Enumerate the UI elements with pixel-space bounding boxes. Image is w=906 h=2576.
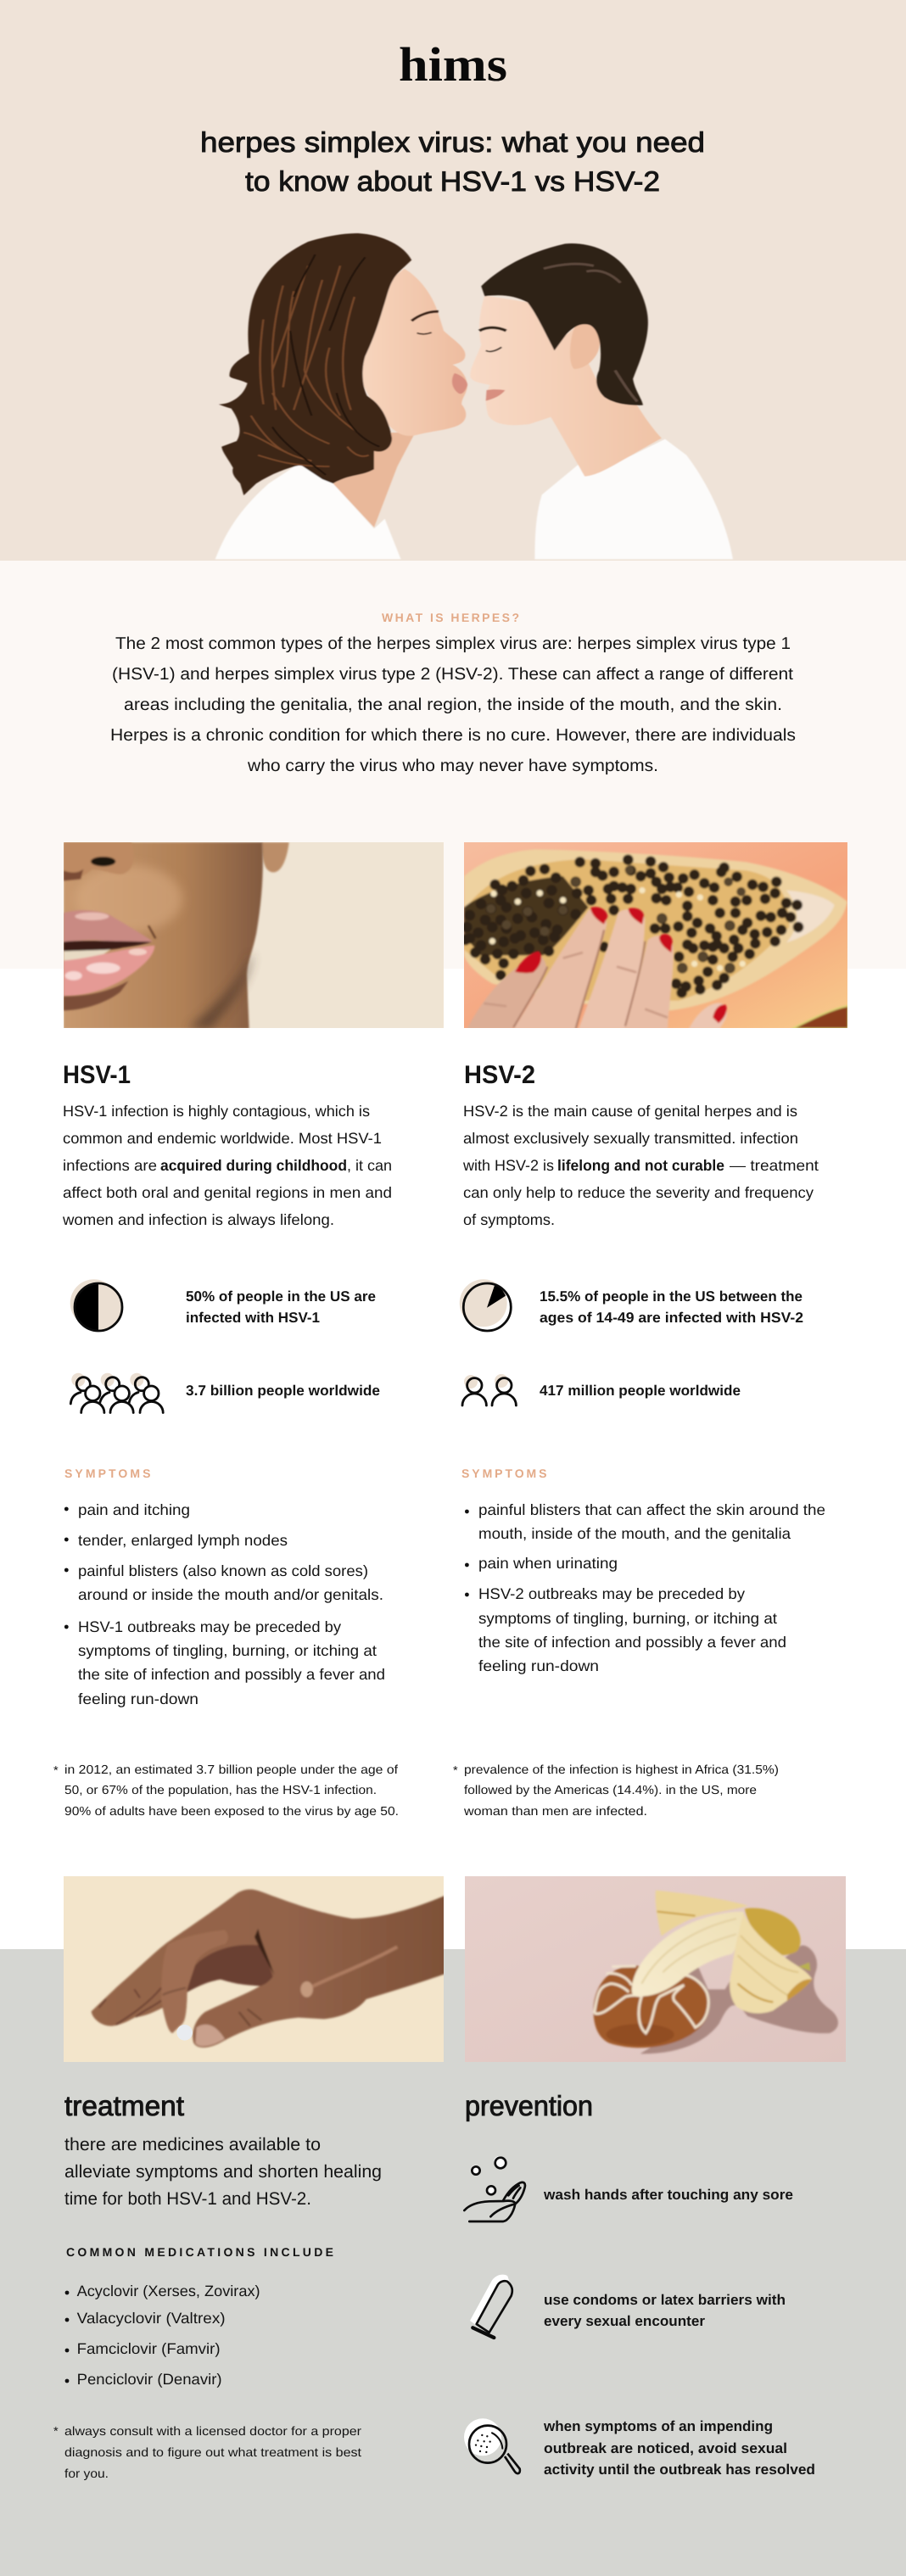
text: wash hands: wash hands after touching any sore [543,2187,793,2203]
palm shadow [187,1945,273,1992]
footnote: treatment: diagnosis and to figure out what treatment is best [64,2446,361,2460]
lip shadow [64,981,129,1010]
light flesh bits [492,891,742,968]
label: symptoms: SYMPTOMS [461,1467,549,1480]
title [200,126,705,197]
footnote: treatment: always consult with a licensed doctor for a proper [64,2425,361,2439]
list: HSV-2 symptoms: painful blisters that can affect the skin around the [478,1501,825,1518]
paragraph: HSV-2 [462,1103,819,1228]
text: avoid during outbreak: when symptoms of an impending [543,2418,773,2434]
intro panel background [0,561,906,969]
logo: hims: hims [399,38,507,92]
jaw shadow [188,955,253,1029]
pill [176,2025,193,2041]
inner seed chamber [786,891,835,942]
panel: prevention [464,2090,815,2478]
intro paragraph: who carry the virus who may never have symptoms. [247,757,658,775]
list: HSV-2 symptoms: symptoms of tingling, burning, or itching at [478,1610,777,1627]
list: HSV-1 symptoms [64,1501,385,1707]
icon: two people [462,1374,516,1405]
heading: prevention: prevention [465,2090,593,2121]
footnote: HSV-1 [53,1763,399,1819]
paragraph: HSV-1: affect both oral and genital regions in men and [63,1184,392,1201]
icon: condom [470,2275,512,2338]
paragraph: HSV-2: lifelong and not curable [557,1157,724,1174]
list: medications [65,2283,260,2388]
text: avoid during outbreak: outbreak are noticed, avoid sexual [544,2440,787,2456]
banana cap [745,1908,801,1955]
list: HSV-2 symptoms: the site of infection and possibly a fever and [478,1634,786,1651]
right person's ear [570,323,600,369]
nose [64,842,155,997]
left person's shirt [215,462,401,559]
label: symptoms: SYMPTOMS [64,1467,153,1480]
paragraph: treatment: there are medicines available to [64,2135,321,2154]
footnote: HSV-2: followed by the Americas (14.4%). in the US, more [464,1784,757,1797]
left person's face [361,269,467,436]
cheek and neck [64,842,263,1029]
paragraph: HSV-1: women and infection is always lifelong. [62,1211,334,1228]
paragraph: HSV-2: almost exclusively sexually transmitted. infection [463,1130,798,1147]
index finger [161,1930,228,2033]
photo: banana and donut [465,1876,847,2062]
stat: 15.5 percent HSV-2: ages of 14-49 are infected with HSV-2 [540,1310,803,1326]
footnote: HSV-1: in 2012, an estimated 3.7 billion people under the age of [64,1763,399,1777]
intro paragraph: (HSV-1) and herpes simplex virus type 2 (HSV-2). These can affect a range of different [112,665,793,684]
right person's features [479,327,506,331]
left person's hair highlights [243,265,369,467]
banana [632,1912,744,1997]
list: HSV-1 symptoms: painful blisters (also known as cold sores) [78,1562,368,1579]
footnote: HSV-2: woman than men are infected. [463,1805,647,1819]
list: medications: Penciclovir (Denavir) [77,2371,222,2388]
footnote: HSV-2 [453,1763,779,1819]
finger shading [513,930,645,1029]
icon: group of people [70,1373,163,1413]
stat: 50 percent HSV-1: infected with HSV-1 [186,1310,320,1326]
paragraph: HSV-1: HSV-1 infection is highly contagious, which is [63,1103,370,1120]
footnote: HSV-1: 90% of adults have been exposed to the virus by age 50. [64,1805,399,1819]
knuckle highlights [300,1981,313,1998]
title: to know about HSV-1 vs HSV-2 [245,165,660,197]
text: use condoms: use condoms or latex barriers with [544,2292,786,2308]
footnote: HSV-2: * [453,1764,458,1778]
back peel [656,1891,748,1936]
stat: 50 percent HSV-1 [186,1288,376,1326]
right person's hair [481,243,648,405]
list: HSV-2 symptoms: HSV-2 outbreaks may be preceded by [478,1585,745,1602]
skin glow [75,865,182,933]
icon: magnifying glass [464,2418,520,2473]
paragraph: treatment: alleviate symptoms and shorten healing [64,2162,382,2182]
intro paragraph: Herpes is a chronic condition for which there is no cure. However, there are individuals [110,726,796,745]
text: use condoms [544,2292,786,2329]
list: HSV-2 symptoms [465,1501,825,1674]
heading: HSV-1: HSV-1 [63,1061,131,1089]
finger crease [99,1988,161,2025]
paragraph: treatment [64,2135,382,2209]
intro paragraph [110,634,796,775]
heading: HSV-2: HSV-2 [464,1061,535,1089]
paragraph: HSV-2: — treatment [730,1157,819,1174]
thumbnail [195,2025,225,2046]
panel: HSV-2 overview [462,1061,819,1228]
text: avoid during outbreak [543,2418,815,2478]
donut [594,1965,709,2048]
rind [792,1006,848,1029]
papaya cavity [464,849,847,1010]
list: medications: Valacyclovir (Valtrex) [77,2310,226,2327]
paragraph: HSV-1: common and endemic worldwide. Most HSV-1 [63,1130,382,1147]
mouth corner [148,925,155,938]
footnote: HSV-1: 50, or 67% of the population, has the HSV-1 infection. [64,1784,377,1797]
photo: lips and cheek [64,842,444,1029]
dense seeds [464,876,589,955]
icon: washing hands [464,2156,525,2221]
label: common medications: COMMON MEDICATIONS INCLUDE [66,2245,333,2259]
list: medications: Famciclovir (Famvir) [77,2340,221,2357]
paragraph: HSV-1: , it can [347,1157,392,1174]
paragraph: HSV-2: can only help to reduce the severity and frequency [463,1184,814,1201]
hanging peel [730,1913,812,2014]
photo: hand holding pill [64,1876,445,2062]
treatment and prevention panel background [0,1949,906,2576]
paragraph: HSV-1 [62,1103,392,1228]
section label: what is herpes: WHAT IS HERPES? [382,611,522,624]
mouth [64,941,152,952]
stat: 15.5 percent HSV-2 [540,1288,803,1326]
shadows [640,1946,838,2054]
icon: pie wedge 15.5 percent [460,1279,511,1331]
text: avoid during outbreak: activity until the outbreak has resolved [544,2461,815,2478]
list: HSV-1 symptoms: feeling run-down [78,1690,199,1707]
ear [261,842,289,872]
list: HSV-1 symptoms: the site of infection and possibly a fever and [78,1666,385,1683]
footnote: treatment: * [53,2425,59,2439]
lower lip [64,946,154,997]
paragraph: HSV-1: acquired during childhood [160,1157,347,1174]
left person's neck [333,433,415,528]
footnote: treatment [53,2425,361,2481]
paragraph: HSV-2: HSV-2 is the main cause of genital herpes and is [463,1103,797,1120]
list: HSV-1 symptoms: HSV-1 outbreaks may be preceded by [78,1618,341,1635]
list: HSV-2 symptoms: mouth, inside of the mouth, and the genitalia [478,1525,791,1542]
panel: HSV-2 symptoms [461,1467,825,1674]
panel: HSV-1 symptoms [64,1467,385,1707]
list: medications: Acyclovir (Xerses, Zovirax) [77,2283,260,2299]
footnote: HSV-2: prevalence of the infection is highest in Africa (31.5%) [464,1763,779,1777]
paragraph: treatment: time for both HSV-1 and HSV-2. [64,2189,311,2209]
photo: couple kissing [215,233,733,559]
list: HSV-1 symptoms: around or inside the mouth and/or genitals. [78,1586,383,1603]
icing [595,1966,708,2033]
footnote: treatment: for you. [64,2467,109,2481]
heading: treatment: treatment [64,2090,184,2121]
left person's features [411,311,439,321]
title: herpes simplex virus: what you need [200,126,705,158]
footnote: HSV-1: * [53,1764,59,1778]
left person's hair [219,233,411,495]
fingers [467,953,546,1029]
intro paragraph: The 2 most common types of the herpes simplex virus are: herpes simplex virus type 1 [115,634,791,653]
list: HSV-1 symptoms: pain and itching [78,1501,190,1518]
icon: half pie 50 percent [70,1279,122,1331]
stat: 3.7 billion: 3.7 billion people worldwide [186,1383,380,1399]
header panel background [0,0,906,561]
stat: 50 percent HSV-1: 50% of people in the US are [186,1288,376,1305]
list: HSV-2 symptoms: pain when urinating [478,1555,618,1572]
paragraph: HSV-1: infections are [63,1157,157,1174]
list: HSV-1 symptoms: tender, enlarged lymph nodes [78,1532,288,1549]
paragraph: HSV-2: with HSV-2 is [462,1157,554,1174]
right person's shirt [534,439,733,559]
list: HSV-1 symptoms: symptoms of tingling, burning, or itching at [78,1642,377,1659]
stat: 417 million: 417 million people worldwide [540,1383,741,1399]
list: HSV-2 symptoms: feeling run-down [478,1657,599,1674]
panel: treatment [53,2090,382,2481]
panel: HSV-1 overview [62,1061,392,1228]
right person's neck and face [470,295,662,477]
red nails [515,907,727,1023]
paragraph: HSV-2: of symptoms. [463,1211,555,1228]
photo: papaya and hand [464,842,848,1029]
text: use condoms: every sexual encounter [544,2313,705,2329]
teeth [64,950,110,961]
intro paragraph: areas including the genitalia, the anal region, the inside of the mouth, and the skin. [124,696,782,714]
stat: 15.5 percent HSV-2: 15.5% of people in the US between the [540,1288,803,1305]
hand [92,1890,445,2048]
upper lip [64,910,153,943]
